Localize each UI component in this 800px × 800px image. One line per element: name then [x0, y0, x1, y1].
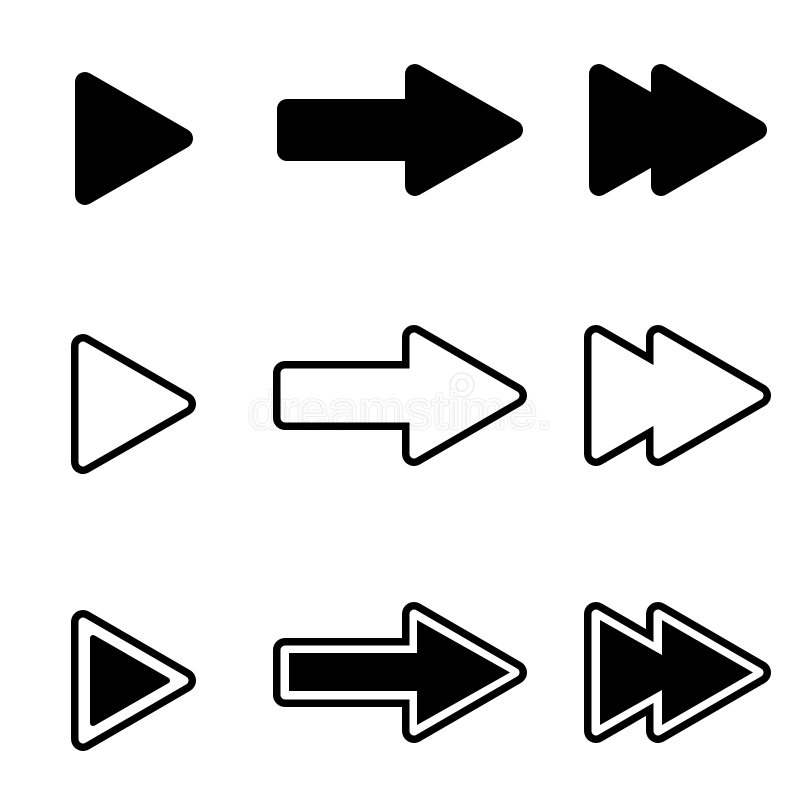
icon: solid fast-forward double triangle — [599, 74, 757, 186]
icon: outlined arrow with solid inner arrow — [285, 614, 515, 731]
icon: solid arrow — [287, 74, 513, 186]
watermark: dreamstime: dreamstime. — [248, 382, 552, 440]
icon: outlined play triangle with solid inner triangle — [83, 622, 184, 739]
icon: outline arrow — [285, 337, 515, 454]
icon: solid play triangle — [85, 82, 183, 195]
watermark: dreamstime: dreamstime. — [248, 382, 552, 440]
icon: outlined fast-forward with solid inner triangles — [596, 614, 759, 731]
icon: outline fast-forward double triangle — [596, 337, 759, 454]
icon: outline play triangle — [83, 346, 184, 462]
